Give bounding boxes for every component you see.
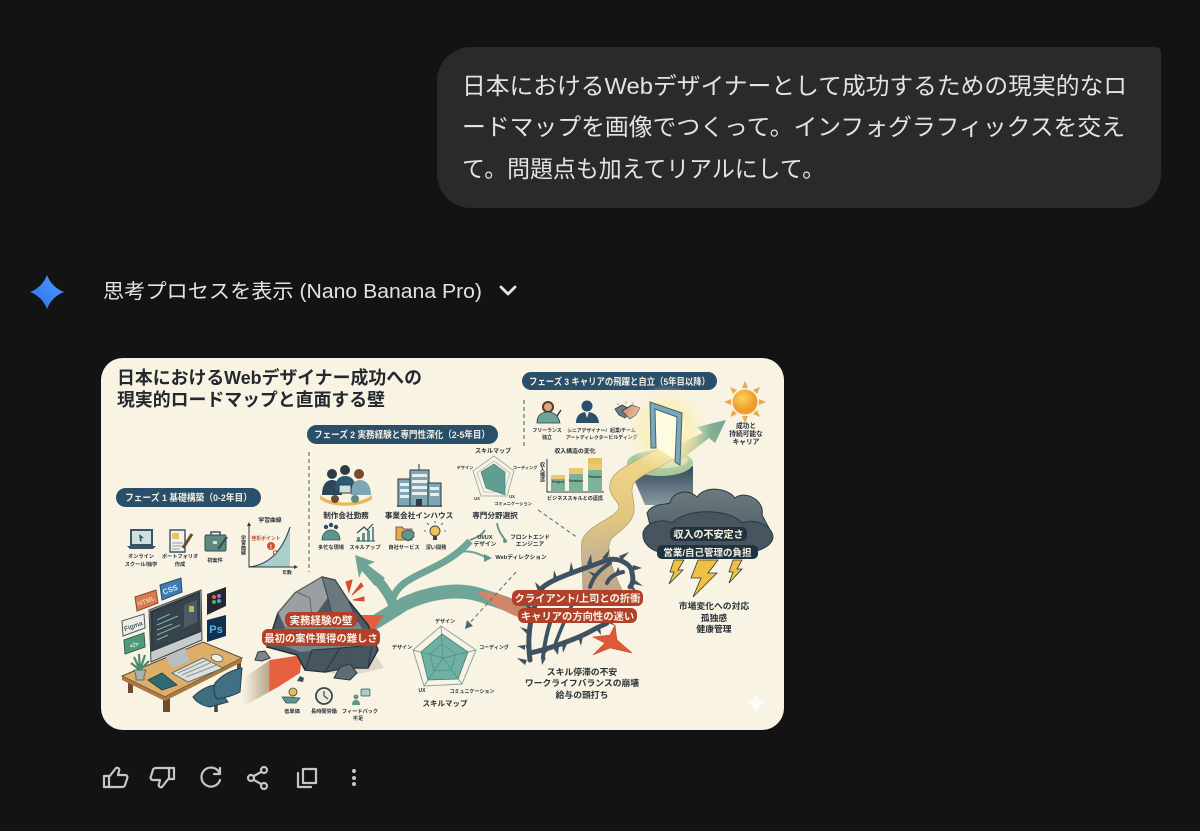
label: sustainable career: 成功と	[736, 421, 756, 430]
large skill map radar: スキルマップ	[422, 699, 468, 708]
icon: senior designer	[576, 400, 599, 423]
labels: career options: 起業/チーム	[610, 427, 636, 434]
icon: agency team	[320, 465, 372, 506]
label: phase 3 issues	[679, 600, 749, 634]
label: portfolio: 作成	[175, 560, 186, 568]
specialty selection: 専門分野選択	[472, 510, 518, 520]
specialty selection: デザイン	[474, 540, 497, 548]
icons: lightning bolts	[669, 560, 742, 597]
labels: wall issues: 長時間労働	[311, 707, 337, 715]
title: 現実的ロードマップと直面する壁	[117, 390, 385, 410]
chart: income structure: 収入構造	[539, 461, 545, 483]
user prompt bubble	[437, 47, 1161, 208]
icon: thumbs down	[151, 768, 174, 787]
action toolbar	[104, 767, 356, 789]
small skill map radar: コーディング	[513, 464, 538, 471]
chart: income structure: Retainer	[569, 479, 584, 483]
monitor	[149, 590, 202, 668]
red path to the wall	[242, 655, 302, 707]
icon: briefcase	[205, 532, 227, 551]
small skill map radar: デザイン	[457, 464, 473, 471]
chart: income structure: Project	[552, 480, 565, 484]
impact marks	[346, 580, 364, 601]
green road with branches	[352, 523, 530, 636]
large skill map radar: デザイン	[392, 644, 412, 651]
chart: learning curve: 挫折ポイント	[251, 535, 281, 542]
large skill map radar: コミュニケーション	[450, 688, 494, 695]
tool tags: Ps	[209, 624, 223, 636]
phase 1 heading: フェーズ 1 基礎構築（0-2年目）	[125, 492, 252, 504]
phase 2 heading	[307, 425, 498, 444]
label: phase 2 issues: 給与の頭打ち	[556, 689, 608, 700]
chart: income structure: ビジネススキルとの連携	[547, 495, 603, 502]
specialty selection: フロントエンド	[510, 534, 550, 541]
labels: sub items: 多忙な現場	[318, 543, 345, 551]
chart: income structure: Passive	[588, 475, 602, 479]
label: first project: 初案件	[207, 556, 223, 564]
pill: sales and self management: 営業/自己管理の負担	[663, 547, 752, 559]
title: 日本におけるWebデザイナー成功への	[117, 367, 422, 388]
small rocks	[255, 651, 270, 661]
phase 3 heading: フェーズ 3 キャリアの飛躍と自立（5年目以降）	[529, 376, 710, 388]
label: in-house: 事業会社インハウス	[385, 510, 453, 520]
tool tags	[122, 578, 226, 654]
icon: Gemini star	[30, 275, 64, 309]
label: phase 3 issues: 市場変化への対応	[679, 600, 749, 611]
large skill map radar: UX	[419, 688, 426, 694]
labels: sub items: 深い開発	[426, 543, 447, 551]
labels: wall issues: フィードバック	[342, 707, 378, 715]
labels: career options: シニアデザイナー/	[567, 427, 607, 434]
golden road and arrow	[581, 420, 726, 590]
label: online school: スクール/独学	[125, 560, 157, 568]
bottom wall issues	[282, 688, 378, 722]
label: sustainable career	[729, 421, 763, 446]
phase 2 heading: フェーズ 2 実務経験と専門性深化（2-5年目）	[314, 429, 490, 441]
labels: career options	[532, 427, 638, 441]
label: portfolio: ポートフォリオ	[162, 552, 198, 560]
label: online school: オンライン	[128, 553, 154, 560]
pill: experience wall: 実務経験の壁	[290, 614, 353, 627]
phase 2 employment options	[318, 464, 453, 551]
label: phase 2 issues: ワークライフバランスの崩壊	[525, 677, 639, 688]
icon: low pay	[282, 688, 300, 703]
icon: refresh	[201, 768, 220, 787]
labels: career options: アートディレクター	[566, 434, 608, 441]
icon: light bulb	[424, 521, 446, 540]
label: phase 2 issues	[525, 666, 639, 700]
user prompt bubble: て。問題点も加えてリアルにして。	[462, 156, 825, 182]
chart: learning curve: 学習曲線	[258, 516, 282, 524]
icon: watermark sparkle	[746, 693, 766, 713]
icon: chevron	[501, 287, 515, 294]
large skill map radar: コーディング	[479, 644, 509, 651]
icon: people	[322, 523, 340, 540]
specialty selection: Webディレクション	[495, 553, 547, 561]
icon: feedback	[352, 689, 370, 705]
plant and notebook	[131, 654, 177, 690]
storm cloud	[643, 489, 773, 559]
icon: red burst	[593, 625, 632, 655]
label: phase 3 issues: 孤独感	[701, 612, 727, 623]
specialty selection: UI/UX	[477, 535, 493, 541]
label: sustainable career: キャリア	[733, 438, 760, 446]
pill: first project difficulty: 最初の案件獲得の難しさ	[264, 632, 378, 645]
labels: wall issues: 低単価	[284, 707, 300, 715]
labels: career options: ビルディング	[608, 434, 638, 441]
keyboard and mouse	[172, 653, 224, 682]
user prompt bubble: ードマップを画像でつくって。インフォグラフィックスを交え	[462, 114, 1125, 140]
wall pills	[262, 612, 380, 646]
chart: learning curve: 年数	[282, 569, 292, 576]
chart: learning curve: 学習曲線	[240, 534, 246, 556]
large skill map radar: デザイン	[435, 618, 455, 625]
pill: client conflict: クライアント/上司との折衝	[515, 592, 641, 605]
labels: sub items: 自社サービス	[388, 543, 420, 551]
icon: more	[352, 769, 356, 786]
labels: sub items: スキルアップ	[349, 544, 381, 551]
door with glow	[623, 384, 711, 472]
labels: sub items	[318, 543, 447, 551]
rock wall	[255, 577, 384, 682]
infographic image panel	[101, 358, 784, 730]
small skill map radar	[457, 448, 538, 507]
thorn barrier	[517, 549, 643, 665]
label: phase 2 issues: スキル停滞の不安	[547, 666, 617, 677]
phase 3 heading	[522, 372, 717, 390]
dashed arrows	[467, 510, 578, 626]
phase 3 career options	[532, 400, 640, 441]
chart: income structure: 収入構造の変化	[554, 447, 596, 455]
specialty selection: エンジニア	[516, 541, 545, 548]
title	[117, 367, 422, 410]
phase 1 heading	[116, 488, 261, 507]
label: sustainable career: 持続可能な	[729, 429, 763, 438]
pill: income instability: 収入の不安定さ	[674, 528, 744, 541]
chart: learning curve: !	[270, 544, 272, 551]
desk	[122, 642, 242, 712]
thinking process header: 思考プロセスを表示 (Nano Banana Pro)	[103, 280, 482, 303]
illustration: desk and computer	[122, 578, 242, 712]
icon: sun	[724, 381, 766, 423]
cliff	[627, 450, 693, 505]
label: phase 3 issues: 健康管理	[696, 623, 732, 634]
large skill map radar	[392, 618, 509, 708]
phase dividers	[309, 400, 524, 572]
pill: career direction: キャリアの方向性の迷い	[521, 610, 634, 623]
pills: career conflict	[512, 590, 643, 623]
icon: thumbs up	[104, 768, 127, 787]
icon: clock	[316, 688, 332, 704]
chair	[193, 668, 242, 712]
user prompt bubble: 日本におけるWebデザイナーとして成功するための現実的なロ	[462, 73, 1127, 99]
label: portfolio	[162, 552, 198, 568]
labels: career options: フリーランス	[532, 428, 562, 434]
labels: career options: 独立	[542, 434, 552, 441]
tool tags: </>	[129, 641, 140, 650]
labels: wall issues: 不足	[353, 715, 364, 722]
icon: folder shield	[396, 527, 414, 541]
tool tags: Figma	[123, 620, 144, 633]
phase 1 icons	[125, 530, 227, 568]
small skill map radar: UX	[509, 494, 515, 499]
icon: portfolio document	[170, 530, 192, 552]
icon: dashed arrowhead	[465, 620, 473, 629]
small skill map radar: UX	[474, 496, 480, 501]
icon: handshake	[615, 401, 640, 419]
tool tags: HTML	[137, 595, 156, 608]
icon: share	[248, 767, 267, 789]
icon: growth chart	[356, 524, 375, 541]
chart: income structure	[539, 447, 604, 502]
labels: wall issues	[284, 707, 378, 722]
tool tags: CSS	[161, 583, 179, 597]
small skill map radar: スキルマップ	[475, 448, 511, 455]
specialty selection	[472, 510, 550, 561]
label: online school	[125, 553, 157, 568]
icon: copy	[298, 769, 316, 787]
small skill map radar: コミュニケーション	[494, 500, 532, 507]
icon: freelancer	[537, 402, 561, 423]
chart: learning curve	[240, 516, 298, 576]
label: agency: 制作会社勤務	[323, 510, 369, 520]
icon: laptop	[127, 530, 156, 549]
icon: office building	[397, 464, 442, 506]
